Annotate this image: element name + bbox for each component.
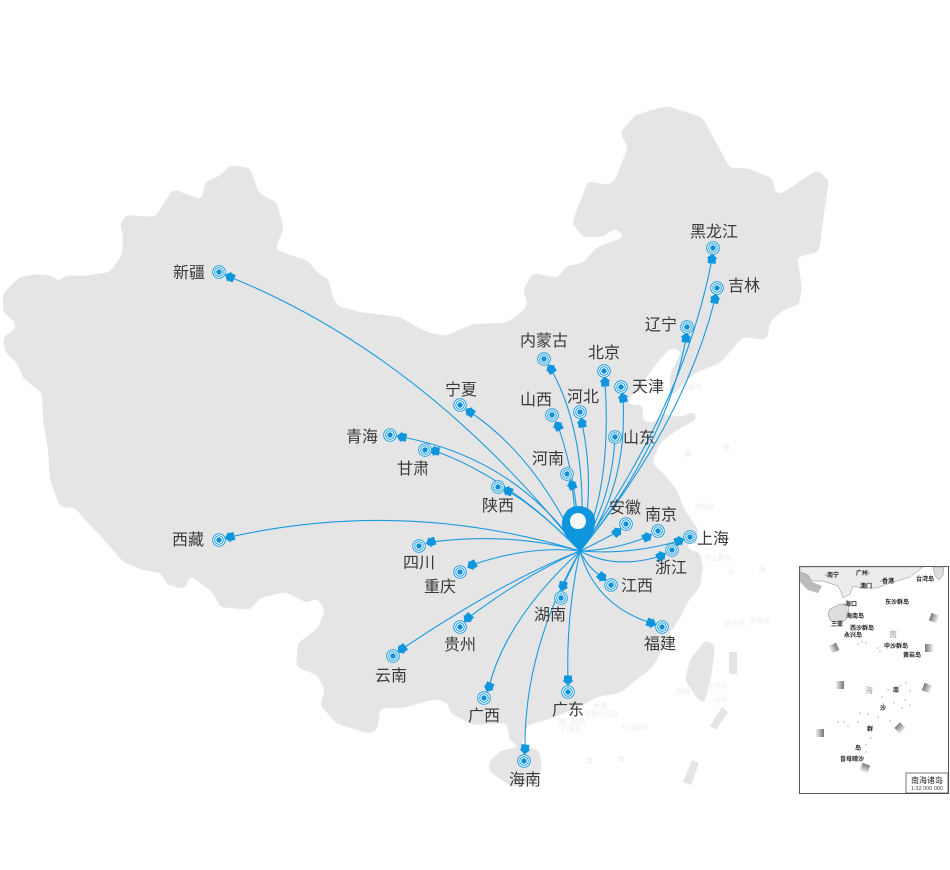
route: 陕西 — [482, 481, 580, 551]
route: 吉林: 吉林 — [728, 277, 760, 295]
inset place labels: 海南岛 — [846, 612, 864, 620]
South China Sea boundary dashes — [683, 652, 737, 785]
route: 陕西: 陕西 — [482, 497, 514, 515]
route: 贵州 — [444, 551, 580, 654]
route: 西藏: 西藏 — [172, 531, 204, 549]
route: 云南: 云南 — [375, 667, 407, 685]
route: 内蒙古 — [520, 332, 582, 551]
faint sea and island labels: 东沙群岛 — [621, 723, 649, 732]
route: 西藏 — [172, 520, 580, 551]
route: 北京 — [580, 344, 620, 551]
inset title box — [906, 773, 948, 793]
faint sea and island labels: 黄 — [684, 449, 692, 458]
route: 重庆 — [424, 550, 580, 596]
inset title box: 南海诸岛 — [911, 775, 943, 785]
faint sea and island labels: 海 — [618, 754, 624, 763]
Hainan island — [488, 746, 542, 787]
route: 海南: 海南 — [509, 771, 541, 789]
route: 山西 — [520, 391, 580, 551]
route: 黑龙江: 黑龙江 — [690, 223, 738, 241]
inset place labels: 东沙群岛 — [885, 598, 909, 606]
inset boundary shading on the mainland edge — [800, 572, 822, 593]
route: 四川: 四川 — [403, 555, 435, 572]
Taiwan island — [685, 640, 715, 705]
route: 贵州: 贵州 — [444, 636, 476, 654]
faint sea and island labels: 南 — [586, 756, 592, 765]
route: 湖南: 湖南 — [534, 606, 566, 624]
route: 山西: 山西 — [520, 391, 552, 409]
route: 内蒙古: 内蒙古 — [520, 332, 568, 350]
origin location pin — [562, 506, 595, 552]
inset: South China Sea islands — [800, 566, 948, 794]
route: 福建 — [580, 551, 676, 653]
route: 江西: 江西 — [621, 577, 653, 595]
faint sea and island labels: 大连群岛 — [674, 382, 702, 391]
inset place labels: 曾母暗沙 — [840, 755, 864, 763]
inset place labels: 岛 — [855, 744, 861, 752]
route: 上海 — [580, 530, 729, 552]
inset place labels: 海 — [865, 685, 873, 695]
route: 南京: 南京 — [645, 506, 677, 524]
inset place labels: 沙 — [880, 705, 886, 712]
inset place labels: 台湾岛 — [916, 575, 934, 583]
route: 安徽 — [580, 499, 641, 551]
inset place labels: 永兴岛 — [844, 631, 862, 639]
route: 福建: 福建 — [644, 635, 676, 653]
route: 北京: 北京 — [588, 344, 620, 362]
faint sea and island labels: 赤尾屿 — [750, 616, 770, 625]
faint sea and island labels: 东 — [728, 568, 734, 577]
route: 新疆: 新疆 — [173, 264, 205, 282]
route: 海南 — [509, 551, 580, 789]
route: 广西 — [468, 551, 580, 725]
route: 山东 — [580, 429, 655, 551]
inset boundary dashes — [816, 613, 939, 773]
route: 河北 — [567, 388, 599, 551]
route: 河南 — [532, 450, 580, 551]
faint sea and island labels: 海 — [722, 443, 730, 452]
route: 浙江 — [580, 544, 687, 577]
route: 云南 — [375, 551, 580, 685]
inset place labels: 群 — [867, 725, 873, 733]
route: 山东: 山东 — [623, 429, 655, 447]
route: 广东 — [552, 551, 584, 719]
inset place labels — [825, 569, 934, 763]
route: 甘肃: 甘肃 — [397, 460, 429, 478]
route: 青海: 青海 — [346, 428, 378, 446]
route: 青海 — [346, 428, 580, 551]
inset place labels: 澳门 — [860, 582, 872, 590]
route: 广东: 广东 — [552, 701, 584, 719]
route: 重庆: 重庆 — [424, 578, 456, 596]
route: 宁夏 — [445, 381, 580, 551]
route: 黑龙江 — [580, 223, 738, 551]
inset place labels: ◦海口 — [843, 600, 857, 608]
inset place labels: 南 — [893, 686, 899, 694]
faint sea and island labels: 兰屿 — [714, 694, 728, 703]
route: 江西 — [580, 551, 653, 595]
faint sea and island labels: 行政区 — [562, 724, 582, 733]
route: 上海: 上海 — [697, 530, 729, 548]
faint sea and island labels: 钓鱼岛 — [724, 619, 746, 628]
route: 河北: 河北 — [567, 388, 599, 406]
faint sea and island labels: 香港 — [593, 701, 607, 710]
route: 辽宁 — [580, 316, 693, 551]
route: 湖南 — [534, 551, 580, 624]
inset place labels: 广州◦ — [856, 569, 870, 577]
route: 南京 — [580, 506, 677, 551]
route: 宁夏: 宁夏 — [445, 381, 477, 399]
route: 辽宁: 辽宁 — [645, 316, 677, 334]
inset island dots — [838, 642, 910, 752]
inset Taiwan — [933, 567, 944, 580]
inset place labels: ◦香港 — [880, 577, 894, 585]
inset place labels: 南 — [889, 629, 897, 639]
faint sea and island labels: 台湾岛 — [706, 681, 728, 690]
inset land — [800, 567, 923, 598]
route: 广西: 广西 — [468, 707, 500, 725]
route: 吉林 — [580, 277, 760, 551]
inset title box: 1:32 000 000 — [911, 786, 943, 792]
route: 天津: 天津 — [632, 378, 664, 396]
inset place labels: ◦南宁 — [825, 571, 839, 579]
faint sea and island labels: 高雄 — [676, 687, 690, 696]
faint sea and island labels: 澳门特别 — [558, 717, 586, 726]
route: 安徽: 安徽 — [609, 499, 641, 517]
route: 河南: 河南 — [532, 450, 564, 468]
route: 天津 — [580, 378, 664, 551]
faint sea and island labels: 特别行政区 — [584, 709, 620, 718]
inset Hainan — [828, 604, 849, 624]
faint sea and island labels: 海 — [758, 565, 766, 574]
route: 四川 — [403, 535, 580, 572]
inset place labels: 中沙群岛 — [884, 642, 908, 650]
mainland — [3, 106, 829, 745]
inset frame — [800, 566, 948, 794]
faint sea and island labels — [558, 382, 770, 765]
route: 新疆 — [173, 264, 580, 551]
faint sea and island labels: 崇明岛 — [694, 502, 716, 511]
inset place labels: 黄岩岛 — [903, 651, 921, 659]
routes: curves, arrows, markers and province labels — [172, 223, 760, 789]
map: China landmass — [3, 106, 829, 787]
inset place labels: 西沙群岛 — [850, 624, 874, 632]
route: 甘肃 — [397, 444, 580, 551]
route: 浙江: 浙江 — [655, 559, 687, 577]
inset place labels: 三亚 — [831, 621, 843, 628]
faint sea and island labels: 舟山群岛 — [704, 553, 732, 562]
